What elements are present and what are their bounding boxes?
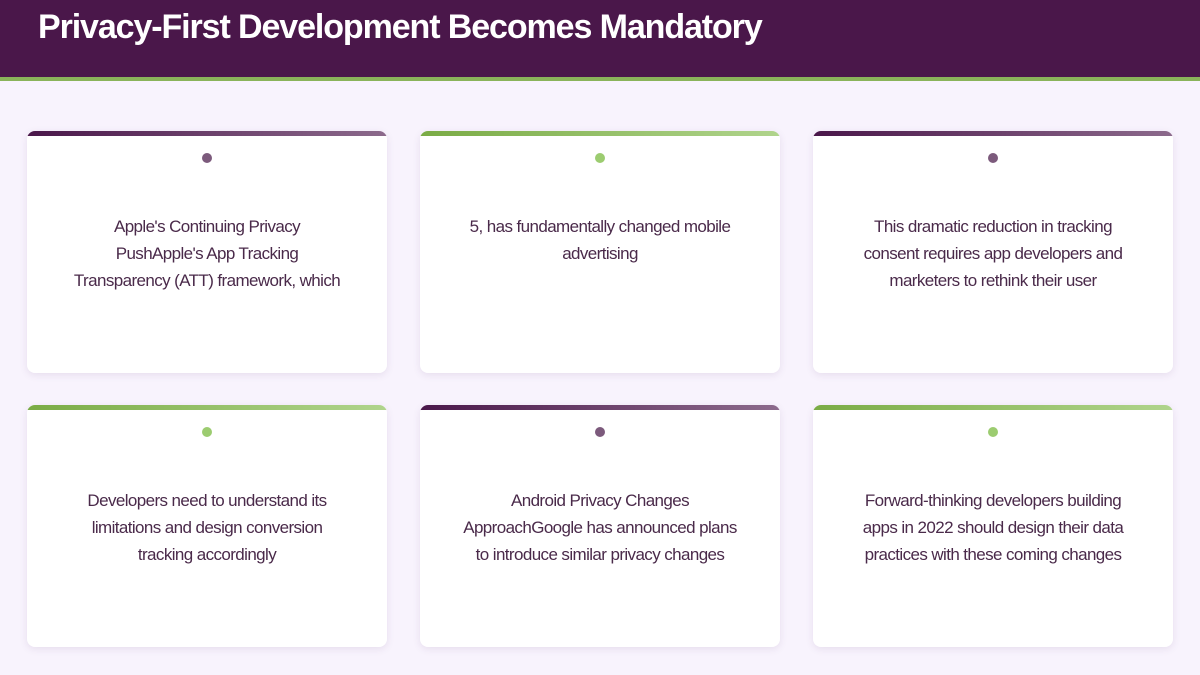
- dot: [202, 153, 212, 163]
- dot: [988, 153, 998, 163]
- header: [0, 0, 1200, 77]
- card 4: [27, 405, 387, 647]
- dot: [202, 427, 212, 437]
- text: Developers need to understand its limitations and design conversion tracking accordingly: [87, 491, 327, 564]
- text: Apple's Continuing Privacy PushApple's App Tracking Transparency (ATT) framework, which: [74, 217, 340, 290]
- card 1: [27, 131, 387, 373]
- dot: [595, 427, 605, 437]
- title: Privacy-First Development Becomes Mandatory: [38, 8, 762, 46]
- card 2: [420, 131, 780, 373]
- dot: [988, 427, 998, 437]
- card 6: [813, 405, 1173, 647]
- card 3: [813, 131, 1173, 373]
- text: Android Privacy Changes ApproachGoogle has announced plans to introduce similar privacy changes: [463, 491, 737, 564]
- text: This dramatic reduction in tracking consent requires app developers and marketers to rethink their user: [864, 217, 1122, 290]
- text: Forward-thinking developers building apps in 2022 should design their data practices with these coming changes: [863, 491, 1123, 564]
- dot: [595, 153, 605, 163]
- text: 5, has fundamentally changed mobile advertising: [470, 217, 730, 263]
- card 5: [420, 405, 780, 647]
